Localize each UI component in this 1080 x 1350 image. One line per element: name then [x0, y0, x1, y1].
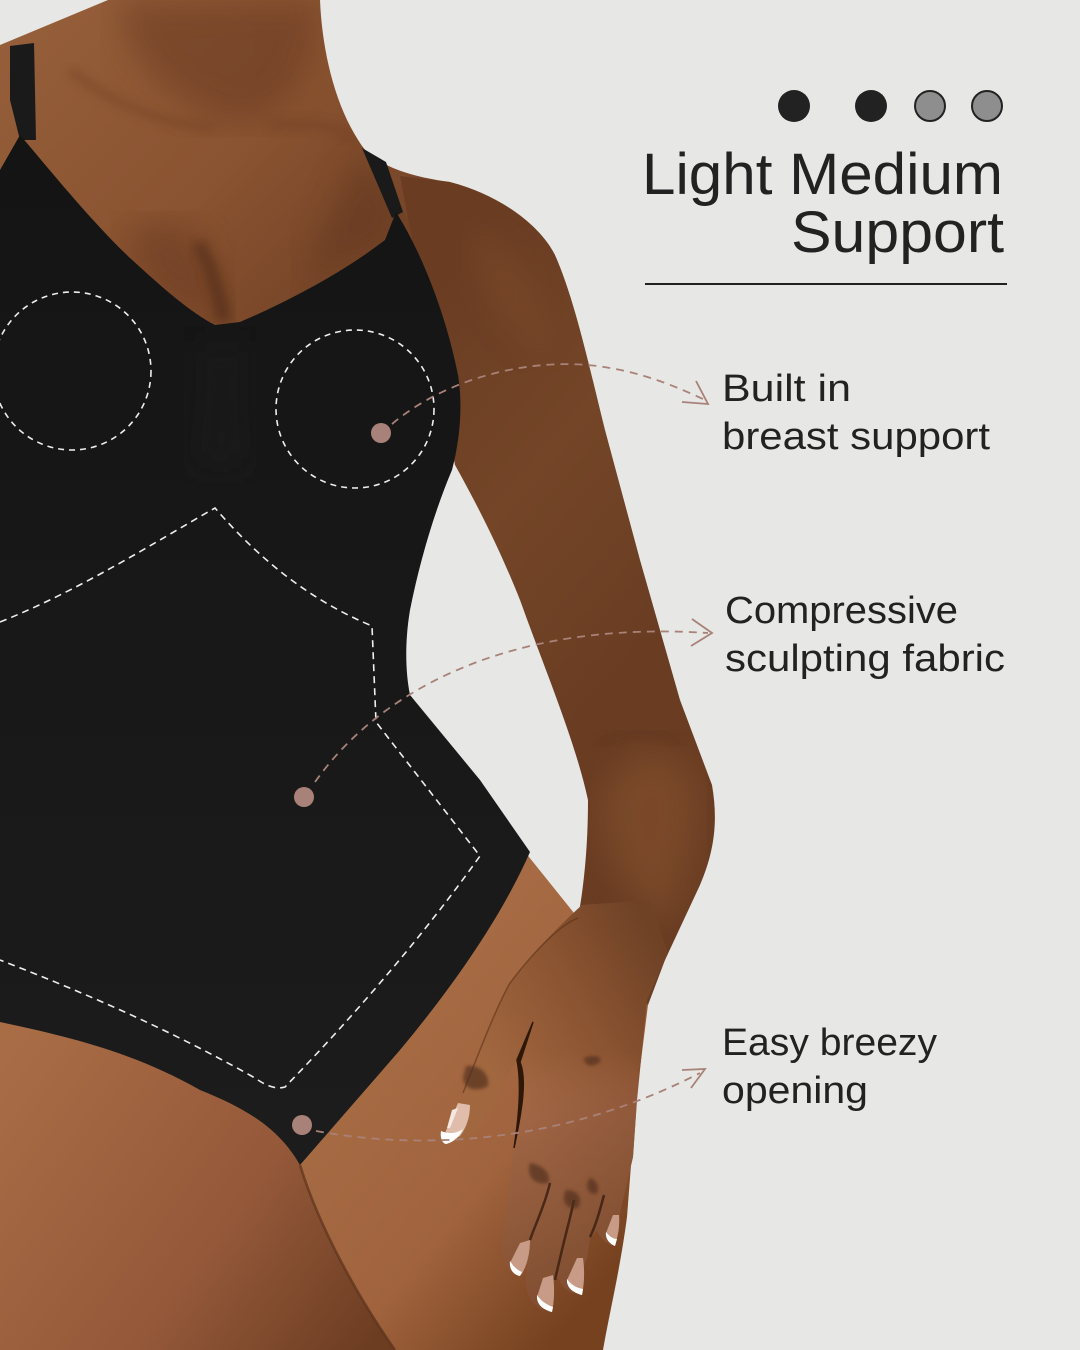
bodysuit — [0, 135, 530, 1165]
neck shadow — [70, 0, 400, 320]
label: breast support — [722, 368, 990, 458]
left strap — [10, 43, 36, 140]
thigh crease — [300, 1165, 395, 1350]
bodysuit shading — [190, 340, 250, 470]
label: breast support: breast support — [722, 416, 990, 458]
right strap — [362, 148, 403, 218]
callout line: sculpting fabric — [294, 619, 712, 807]
label: breezy opening: Easy breezy — [722, 1022, 937, 1064]
chest and neck skin — [0, 0, 470, 340]
knuckles — [463, 1056, 600, 1208]
label: sculpting fabric: sculpting fabric — [725, 638, 1005, 680]
title: Light Medium — [642, 142, 1003, 207]
dashed zone: compression panel — [0, 508, 480, 1088]
dashed zone: right breast — [276, 330, 434, 488]
dashed zone: left breast — [0, 292, 151, 450]
label: breezy opening — [722, 1022, 937, 1112]
model figure — [0, 0, 715, 1350]
lower fingers tone — [503, 1097, 638, 1310]
label: sculpting fabric — [725, 590, 1005, 680]
arm — [400, 176, 715, 1010]
hand — [442, 900, 668, 1310]
title rule — [645, 283, 1007, 285]
finger gaps — [530, 1183, 604, 1280]
support level dots — [778, 90, 1002, 122]
left thigh — [0, 1000, 395, 1350]
label: breezy opening: opening — [722, 1070, 868, 1112]
title — [642, 142, 1004, 265]
cleavage shadow — [192, 240, 232, 322]
shoulder and forearm highlights — [470, 230, 697, 925]
callout line: breezy opening — [292, 1069, 705, 1140]
fingernails — [441, 1103, 619, 1312]
gap between index and middle finger — [514, 1022, 533, 1148]
callout line: breast support — [371, 364, 708, 443]
label: sculpting fabric: Compressive — [725, 590, 958, 632]
hand edge line — [463, 918, 578, 1093]
label: breast support: Built in — [722, 368, 851, 410]
back of hand — [442, 900, 668, 1310]
right thigh — [300, 852, 648, 1350]
title: Support — [791, 200, 1004, 265]
